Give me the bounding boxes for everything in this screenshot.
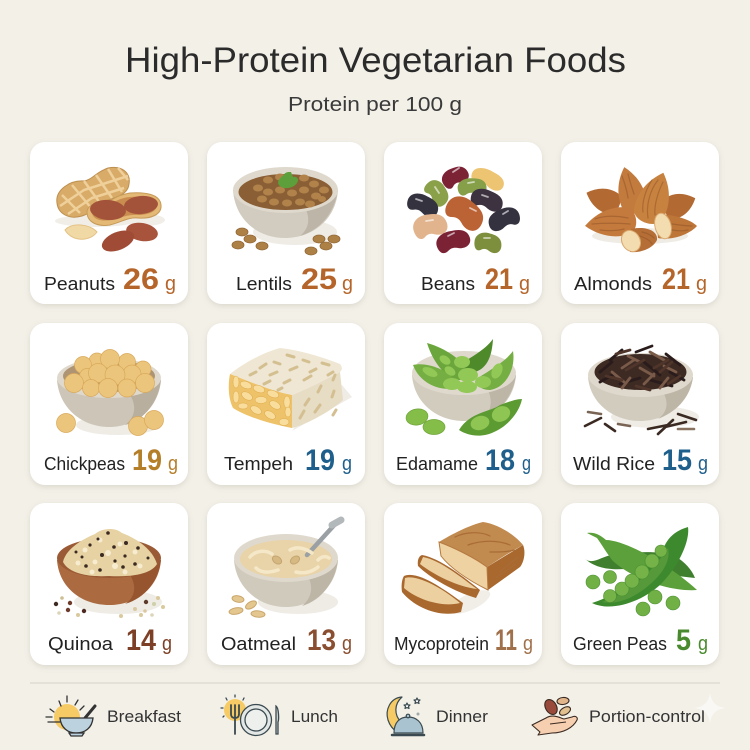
- label: lunch: Lunch: [291, 707, 338, 726]
- panel: peanuts: [30, 142, 188, 304]
- label: peanuts: g: [165, 273, 176, 295]
- panel: edamame: [384, 323, 542, 485]
- icon: dinner: [387, 697, 424, 735]
- label: almonds: 21: [662, 263, 690, 296]
- label: edamame: [396, 444, 531, 477]
- label: beans: g: [519, 273, 530, 295]
- label: chickpeas: [44, 444, 178, 477]
- icon: lentils bowl: [232, 167, 340, 255]
- icon: lunch: [221, 695, 279, 736]
- panel: mycoprotein: [384, 503, 542, 665]
- label: edamame: 18: [485, 444, 515, 477]
- footer item: breakfast: [46, 696, 181, 736]
- label: beans: [421, 263, 530, 296]
- icon: oatmeal bowl: [229, 520, 341, 618]
- label: beans: 21: [485, 263, 513, 296]
- title: High-Protein Vegetarian Foods: [125, 40, 626, 80]
- icon: mixed beans: [405, 162, 522, 256]
- label: oatmeal: g: [342, 633, 352, 655]
- label: green peas: Green Peas: [573, 633, 667, 654]
- panel: quinoa: [30, 503, 188, 665]
- label: wild rice: 15: [662, 444, 692, 477]
- footer item: portion-control: [532, 697, 705, 735]
- label: peanuts: [44, 263, 176, 296]
- panel: oatmeal: [207, 503, 365, 665]
- label: lentils: [236, 263, 353, 296]
- label: tempeh: Tempeh: [224, 453, 293, 474]
- label: mycoprotein: [394, 624, 533, 657]
- label: almonds: [574, 263, 707, 296]
- label: beans: Beans: [421, 273, 475, 294]
- label: tempeh: 19: [305, 444, 335, 477]
- label: dinner: Dinner: [436, 707, 488, 726]
- label: quinoa: 14: [126, 624, 156, 657]
- label: wild rice: Wild Rice: [573, 453, 655, 474]
- icon: quinoa bowl: [54, 529, 165, 618]
- label: almonds: g: [696, 273, 707, 295]
- panel: wild rice: [561, 323, 719, 485]
- icon: mycoprotein loaf: [402, 522, 524, 619]
- label: tempeh: g: [342, 453, 352, 475]
- icon: peanuts: [55, 167, 165, 256]
- label: quinoa: Quinoa: [48, 633, 114, 654]
- footer item: dinner: [387, 697, 488, 735]
- label: chickpeas: Chickpeas: [44, 454, 125, 474]
- panel: chickpeas: [30, 323, 188, 485]
- label: mycoprotein: 11: [495, 624, 517, 657]
- label: oatmeal: [221, 624, 352, 657]
- icon: green peas pods: [584, 527, 697, 616]
- label: lentils: 25: [301, 263, 337, 296]
- icon: portion-control hand with beans: [532, 697, 577, 735]
- subtitle: Protein per 100 g: [288, 93, 462, 116]
- panel: beans: [384, 142, 542, 304]
- sparkle watermark: [694, 692, 726, 724]
- label: green peas: g: [698, 633, 708, 655]
- panel: tempeh: [207, 323, 365, 485]
- icon: edamame bowl: [405, 339, 522, 436]
- label: peanuts: Peanuts: [44, 273, 115, 294]
- label: wild rice: g: [698, 453, 708, 475]
- label: mycoprotein: Mycoprotein: [394, 634, 489, 654]
- label: wild rice: [573, 444, 708, 477]
- footer item: lunch: [221, 695, 338, 736]
- icon: almonds: [582, 164, 700, 255]
- label: breakfast: Breakfast: [107, 707, 181, 726]
- label: chickpeas: 19: [132, 444, 162, 477]
- icon: tempeh block: [229, 348, 352, 431]
- label: oatmeal: Oatmeal: [221, 633, 296, 654]
- icon: chickpeas bowl: [56, 350, 164, 436]
- label: edamame: Edamame: [396, 454, 478, 474]
- label: edamame: g: [522, 453, 531, 475]
- label: oatmeal: 13: [307, 624, 336, 657]
- icon: breakfast: [46, 696, 95, 736]
- label: tempeh: [224, 444, 352, 477]
- label: peanuts: 26: [123, 263, 159, 296]
- panel: green peas: [561, 503, 719, 665]
- label: almonds: Almonds: [574, 273, 652, 294]
- icon: wild rice bowl: [585, 346, 699, 434]
- label: portion-control: Portion-control: [589, 707, 705, 726]
- label: quinoa: [48, 624, 172, 657]
- label: mycoprotein: g: [523, 633, 533, 655]
- label: lentils: g: [342, 273, 353, 295]
- panel: almonds: [561, 142, 719, 304]
- label: green peas: [573, 624, 708, 657]
- footer divider: [30, 682, 720, 684]
- label: lentils: Lentils: [236, 273, 292, 294]
- label: chickpeas: g: [168, 453, 178, 475]
- label: green peas: 5: [676, 624, 691, 657]
- label: quinoa: g: [162, 633, 172, 655]
- panel: lentils: [207, 142, 365, 304]
